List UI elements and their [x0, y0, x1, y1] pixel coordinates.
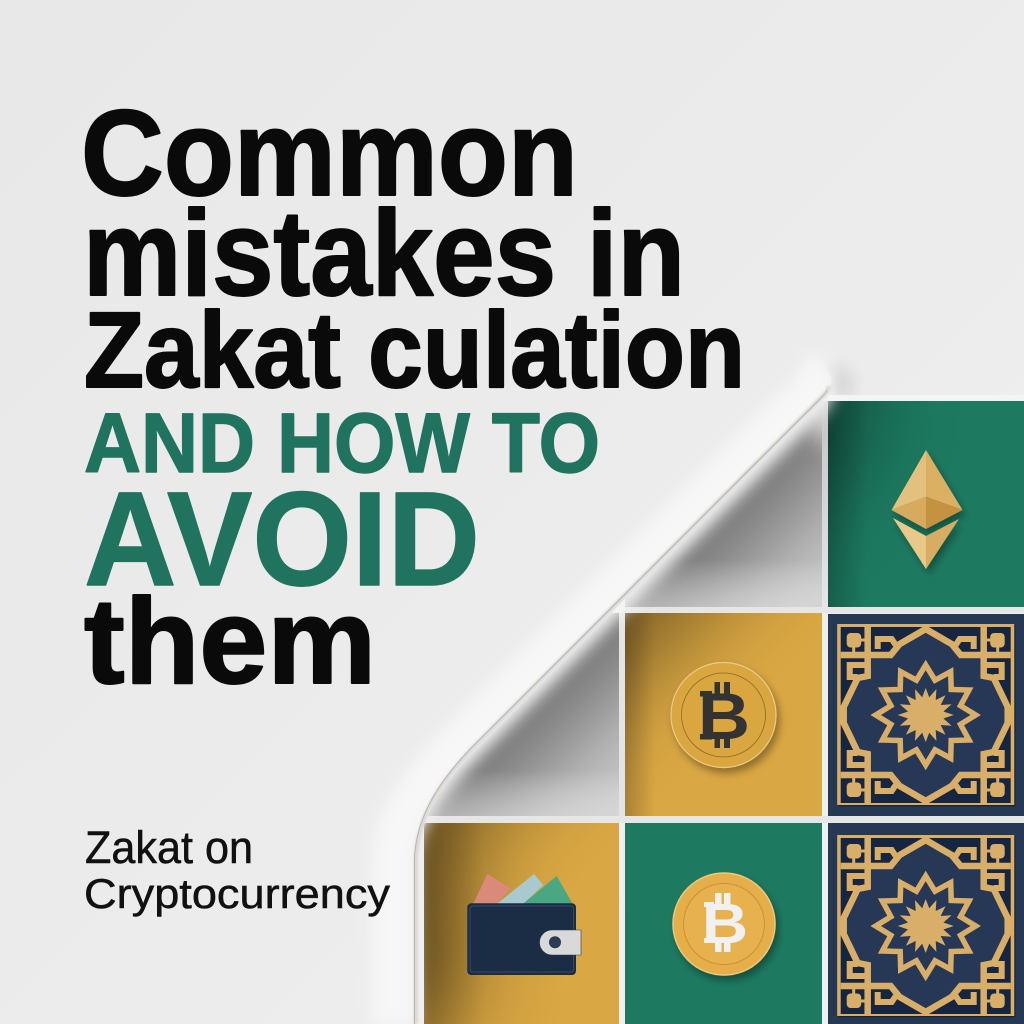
icon: ethereum diamond [892, 450, 962, 569]
subtitle [84, 822, 390, 917]
title: green highlight: AND HOW TO [84, 396, 600, 490]
tile: ethereum green [828, 401, 1024, 607]
title: last line: them [84, 573, 376, 709]
paper fold shadow on tiles [424, 401, 906, 1024]
tile: navy islamic pattern lower [828, 823, 1024, 1024]
title: green highlight: AVOID [84, 465, 480, 614]
subtitle: Cryptocurrency [84, 870, 390, 917]
title: mistakes in [83, 185, 685, 321]
icon: wallet with banknotes [467, 874, 581, 975]
title: Zakat culation [84, 289, 745, 410]
tile: navy islamic pattern [828, 614, 1024, 816]
icon: green tile bitcoin coin [673, 873, 775, 975]
soft shadow beside folded corner [826, 370, 850, 398]
icon: gold tile bitcoin coin: B [698, 679, 750, 753]
highlight on grey tile near corner [805, 402, 822, 452]
tile: gold with bitcoin coin [625, 613, 822, 816]
title: green highlight [84, 396, 600, 614]
icon: green tile bitcoin coin: B [702, 892, 748, 956]
tile grid [424, 395, 1024, 1024]
title [81, 85, 745, 410]
title: Common [81, 85, 578, 221]
icon: gold tile bitcoin coin [671, 662, 776, 768]
tile: grey lower [424, 613, 619, 816]
tile: green with bitcoin coin [625, 823, 822, 1024]
subtitle: Zakat on [85, 822, 253, 873]
tile: gold with wallet [424, 823, 619, 1024]
tile: grey upper [625, 401, 822, 607]
